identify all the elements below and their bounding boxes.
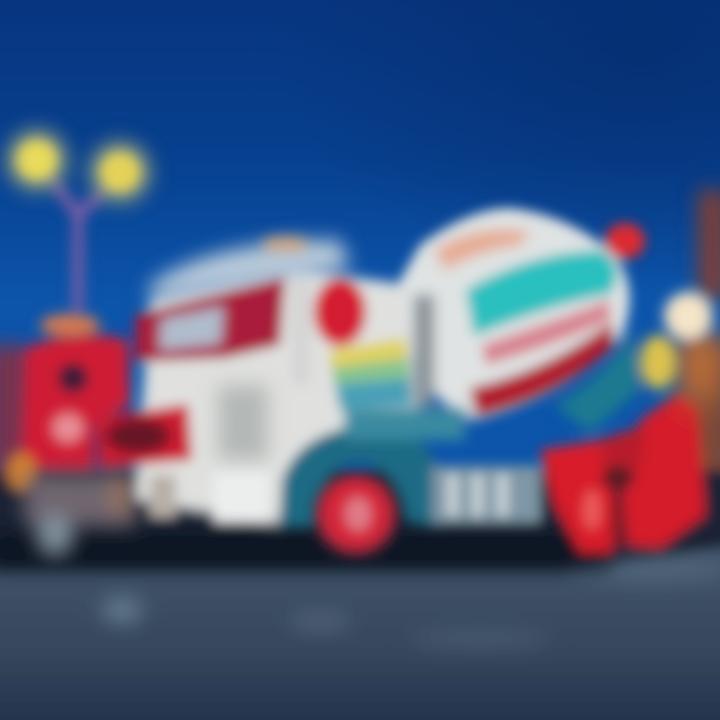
road surface	[0, 545, 720, 720]
lamp glow left	[7, 130, 67, 190]
rainbow stripes on door	[330, 338, 412, 410]
side window red	[314, 278, 366, 346]
lamp post	[52, 180, 106, 310]
street lamp	[7, 130, 150, 310]
rear light yellow	[640, 335, 676, 389]
cab roof	[150, 240, 350, 300]
wheel tyre	[312, 470, 400, 558]
truck shadow under body	[0, 530, 610, 568]
windshield glass	[158, 305, 225, 352]
red left lobe	[540, 440, 615, 552]
lamp core left	[17, 140, 57, 180]
door shading	[218, 385, 268, 460]
drum cap red	[605, 223, 645, 259]
road highlights	[102, 558, 720, 650]
drum teal band	[466, 250, 617, 336]
background: dark right edge building	[682, 190, 720, 530]
teal fender	[280, 425, 440, 525]
door pillar	[292, 280, 310, 385]
drum rear teal	[555, 330, 640, 432]
drum pink stripe	[482, 300, 610, 365]
background: darker sky corner	[200, 0, 720, 340]
drum red band	[470, 322, 614, 417]
grille red	[96, 404, 192, 468]
left red vehicle and decoration	[0, 314, 130, 492]
windshield frame	[135, 277, 285, 362]
drum body	[400, 208, 630, 420]
pink highlight	[583, 490, 601, 530]
dark gap	[602, 466, 634, 490]
bumper and lower left	[25, 475, 135, 555]
chassis teal fender and wheel	[280, 408, 465, 558]
orange glow	[678, 325, 720, 405]
lamp glow right	[90, 142, 150, 202]
wheel centre	[345, 497, 371, 531]
dark backdrop behind lower truck	[0, 470, 720, 580]
red bridge	[600, 425, 645, 475]
rear light white	[664, 292, 712, 340]
lamp core right	[100, 152, 140, 192]
red right lobe	[622, 392, 705, 548]
drum shadow left	[414, 295, 434, 405]
teal chassis panel	[345, 408, 465, 440]
cab of truck	[96, 236, 420, 525]
drum orange top band	[435, 229, 530, 270]
lower bumper stripes	[150, 472, 268, 522]
wheel red hub	[321, 479, 391, 549]
gap shadow	[612, 500, 624, 546]
side storage panel	[432, 466, 540, 522]
rear red machinery	[540, 392, 705, 552]
mixer drum	[400, 208, 645, 432]
rear lights	[640, 292, 720, 405]
roof light	[261, 236, 309, 252]
cab body	[135, 270, 420, 525]
